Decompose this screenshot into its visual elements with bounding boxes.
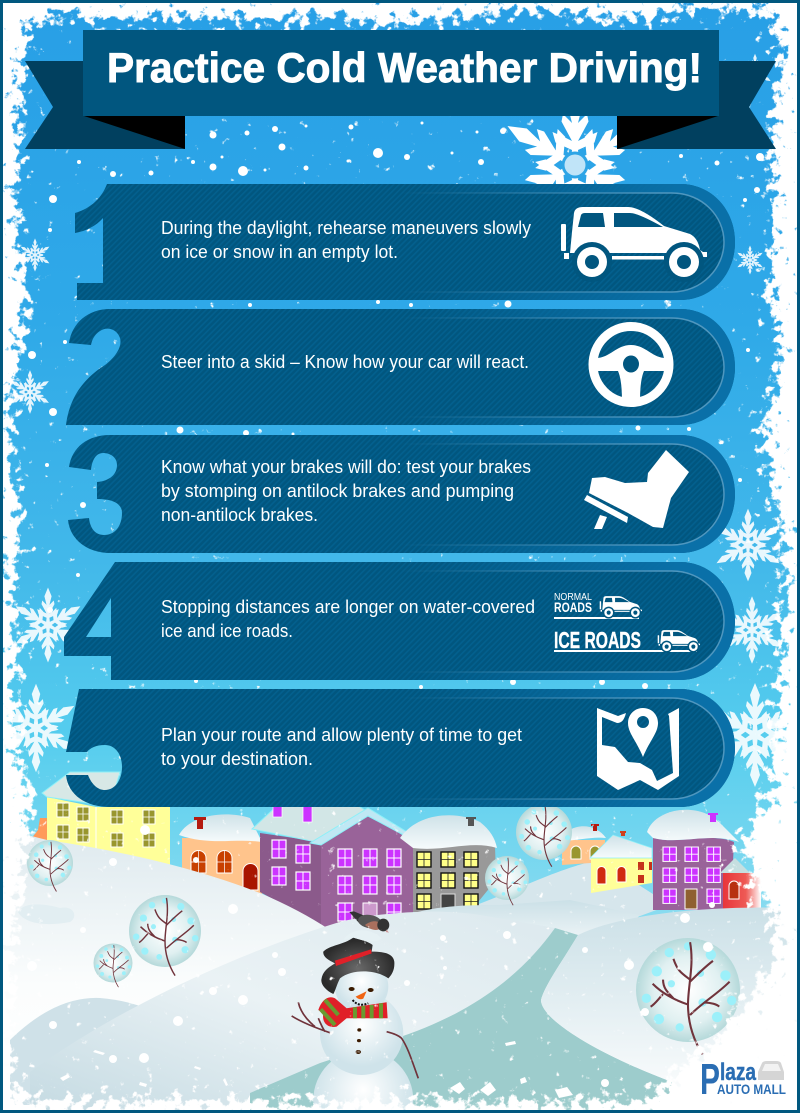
snow flecks on the ground	[27, 825, 715, 1098]
snow mound	[18, 904, 74, 924]
panel 1 text: During the daylight, rehearse maneuvers slowly	[161, 217, 532, 238]
icon: road comparison: NORMAL	[554, 592, 592, 603]
icon: steering wheel	[593, 326, 669, 403]
back hills	[440, 860, 670, 938]
trees	[27, 840, 73, 892]
icon: gray car	[758, 1061, 784, 1080]
purple main building	[251, 807, 413, 927]
yellow building	[42, 772, 170, 865]
panel 4 text: Stopping distances are longer on water-covered	[161, 596, 535, 617]
icon: road comparison: ICE ROADS	[554, 627, 641, 653]
logo: Plaza Auto Mall	[700, 1055, 786, 1104]
panel 3 text: Know what your brakes will do: test your brakes	[161, 456, 531, 477]
panel 2: steer into skid	[66, 309, 735, 425]
panel 4 text: ice and ice roads.	[161, 620, 293, 641]
panel 4: stopping distances	[64, 562, 735, 680]
panel 5: plan your route	[66, 689, 735, 807]
left orange house	[33, 818, 47, 840]
right purple house	[647, 810, 739, 910]
icon: boot on pedal	[584, 450, 689, 529]
road	[250, 928, 672, 1113]
red house	[720, 858, 761, 910]
side snowflakes	[0, 54, 800, 787]
snowman	[292, 911, 418, 1113]
small right houses	[560, 824, 652, 893]
logo: Plaza Auto Mall: laza	[720, 1059, 757, 1086]
icon: road comparison	[554, 592, 700, 653]
panel 5 text: Plan your route and allow plenty of time to get	[161, 724, 522, 745]
snowflake behind title	[508, 116, 626, 184]
logo: Plaza Auto Mall: P	[700, 1055, 720, 1104]
hat	[321, 938, 394, 994]
falling snow dots	[28, 122, 764, 689]
gray building	[400, 815, 497, 912]
orange snow-roof house	[179, 814, 262, 898]
logo: Plaza Auto Mall: AUTO MALL	[717, 1081, 786, 1097]
bird	[349, 911, 389, 933]
icon: SUV	[561, 207, 707, 282]
panel 5 text: to your destination.	[161, 748, 313, 769]
panel 1: daylight practice	[75, 184, 735, 300]
right hill	[541, 908, 797, 1080]
panel 2 text: Steer into a skid – Know how your car will react.	[161, 351, 529, 372]
panel 3 text: by stomping on antilock brakes and pumping	[161, 480, 514, 501]
right ribbon tail	[710, 61, 776, 149]
hills	[418, 900, 638, 935]
face	[349, 987, 355, 991]
panel 3 text: non-antilock brakes.	[161, 504, 318, 525]
buttons	[357, 1028, 361, 1032]
title ribbon	[25, 30, 776, 149]
left ribbon tail	[25, 61, 90, 149]
icon: map with pin	[597, 708, 679, 790]
arms	[292, 1002, 418, 1078]
icon: road comparison: ROADS	[554, 599, 592, 615]
scarf	[318, 997, 388, 1027]
heading: Practice Cold Weather Driving!	[107, 44, 702, 91]
panel 1 text: on ice or snow in an empty lot.	[161, 241, 398, 262]
panel 3: brakes	[68, 435, 735, 553]
